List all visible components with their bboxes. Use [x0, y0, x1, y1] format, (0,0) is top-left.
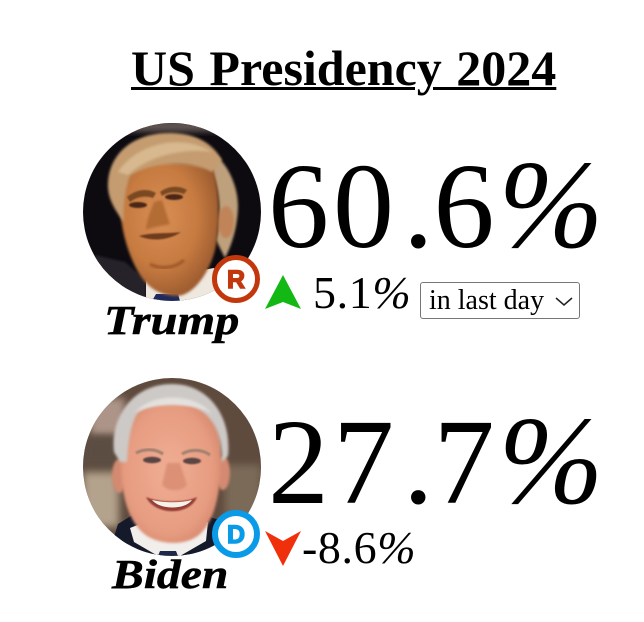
value: Biden share: 27.7% — [268, 392, 603, 531]
panel: Biden — [83, 378, 603, 597]
value: Trump share: 60.6% — [268, 136, 603, 275]
change: Trump: 5.1% — [313, 267, 411, 318]
icon: Democratic badge — [212, 510, 260, 558]
portrait: Trump — [83, 123, 261, 301]
icon: Republican badge — [212, 255, 260, 303]
label: Biden: Biden — [112, 551, 228, 597]
icon: down arrow — [265, 531, 301, 566]
dropdown: time range: in last day — [429, 285, 544, 316]
change: Biden: -8.6% — [302, 522, 416, 573]
label: Trump: Trump — [104, 297, 239, 343]
title: US Presidency 2024 — [131, 40, 556, 96]
icon: Democratic badge: D — [227, 521, 245, 549]
panel: Trump — [83, 123, 603, 344]
portrait: Biden — [83, 378, 261, 556]
dropdown: time range — [420, 282, 580, 319]
icon: Republican badge: R — [227, 266, 245, 294]
icon: up arrow — [265, 275, 301, 309]
